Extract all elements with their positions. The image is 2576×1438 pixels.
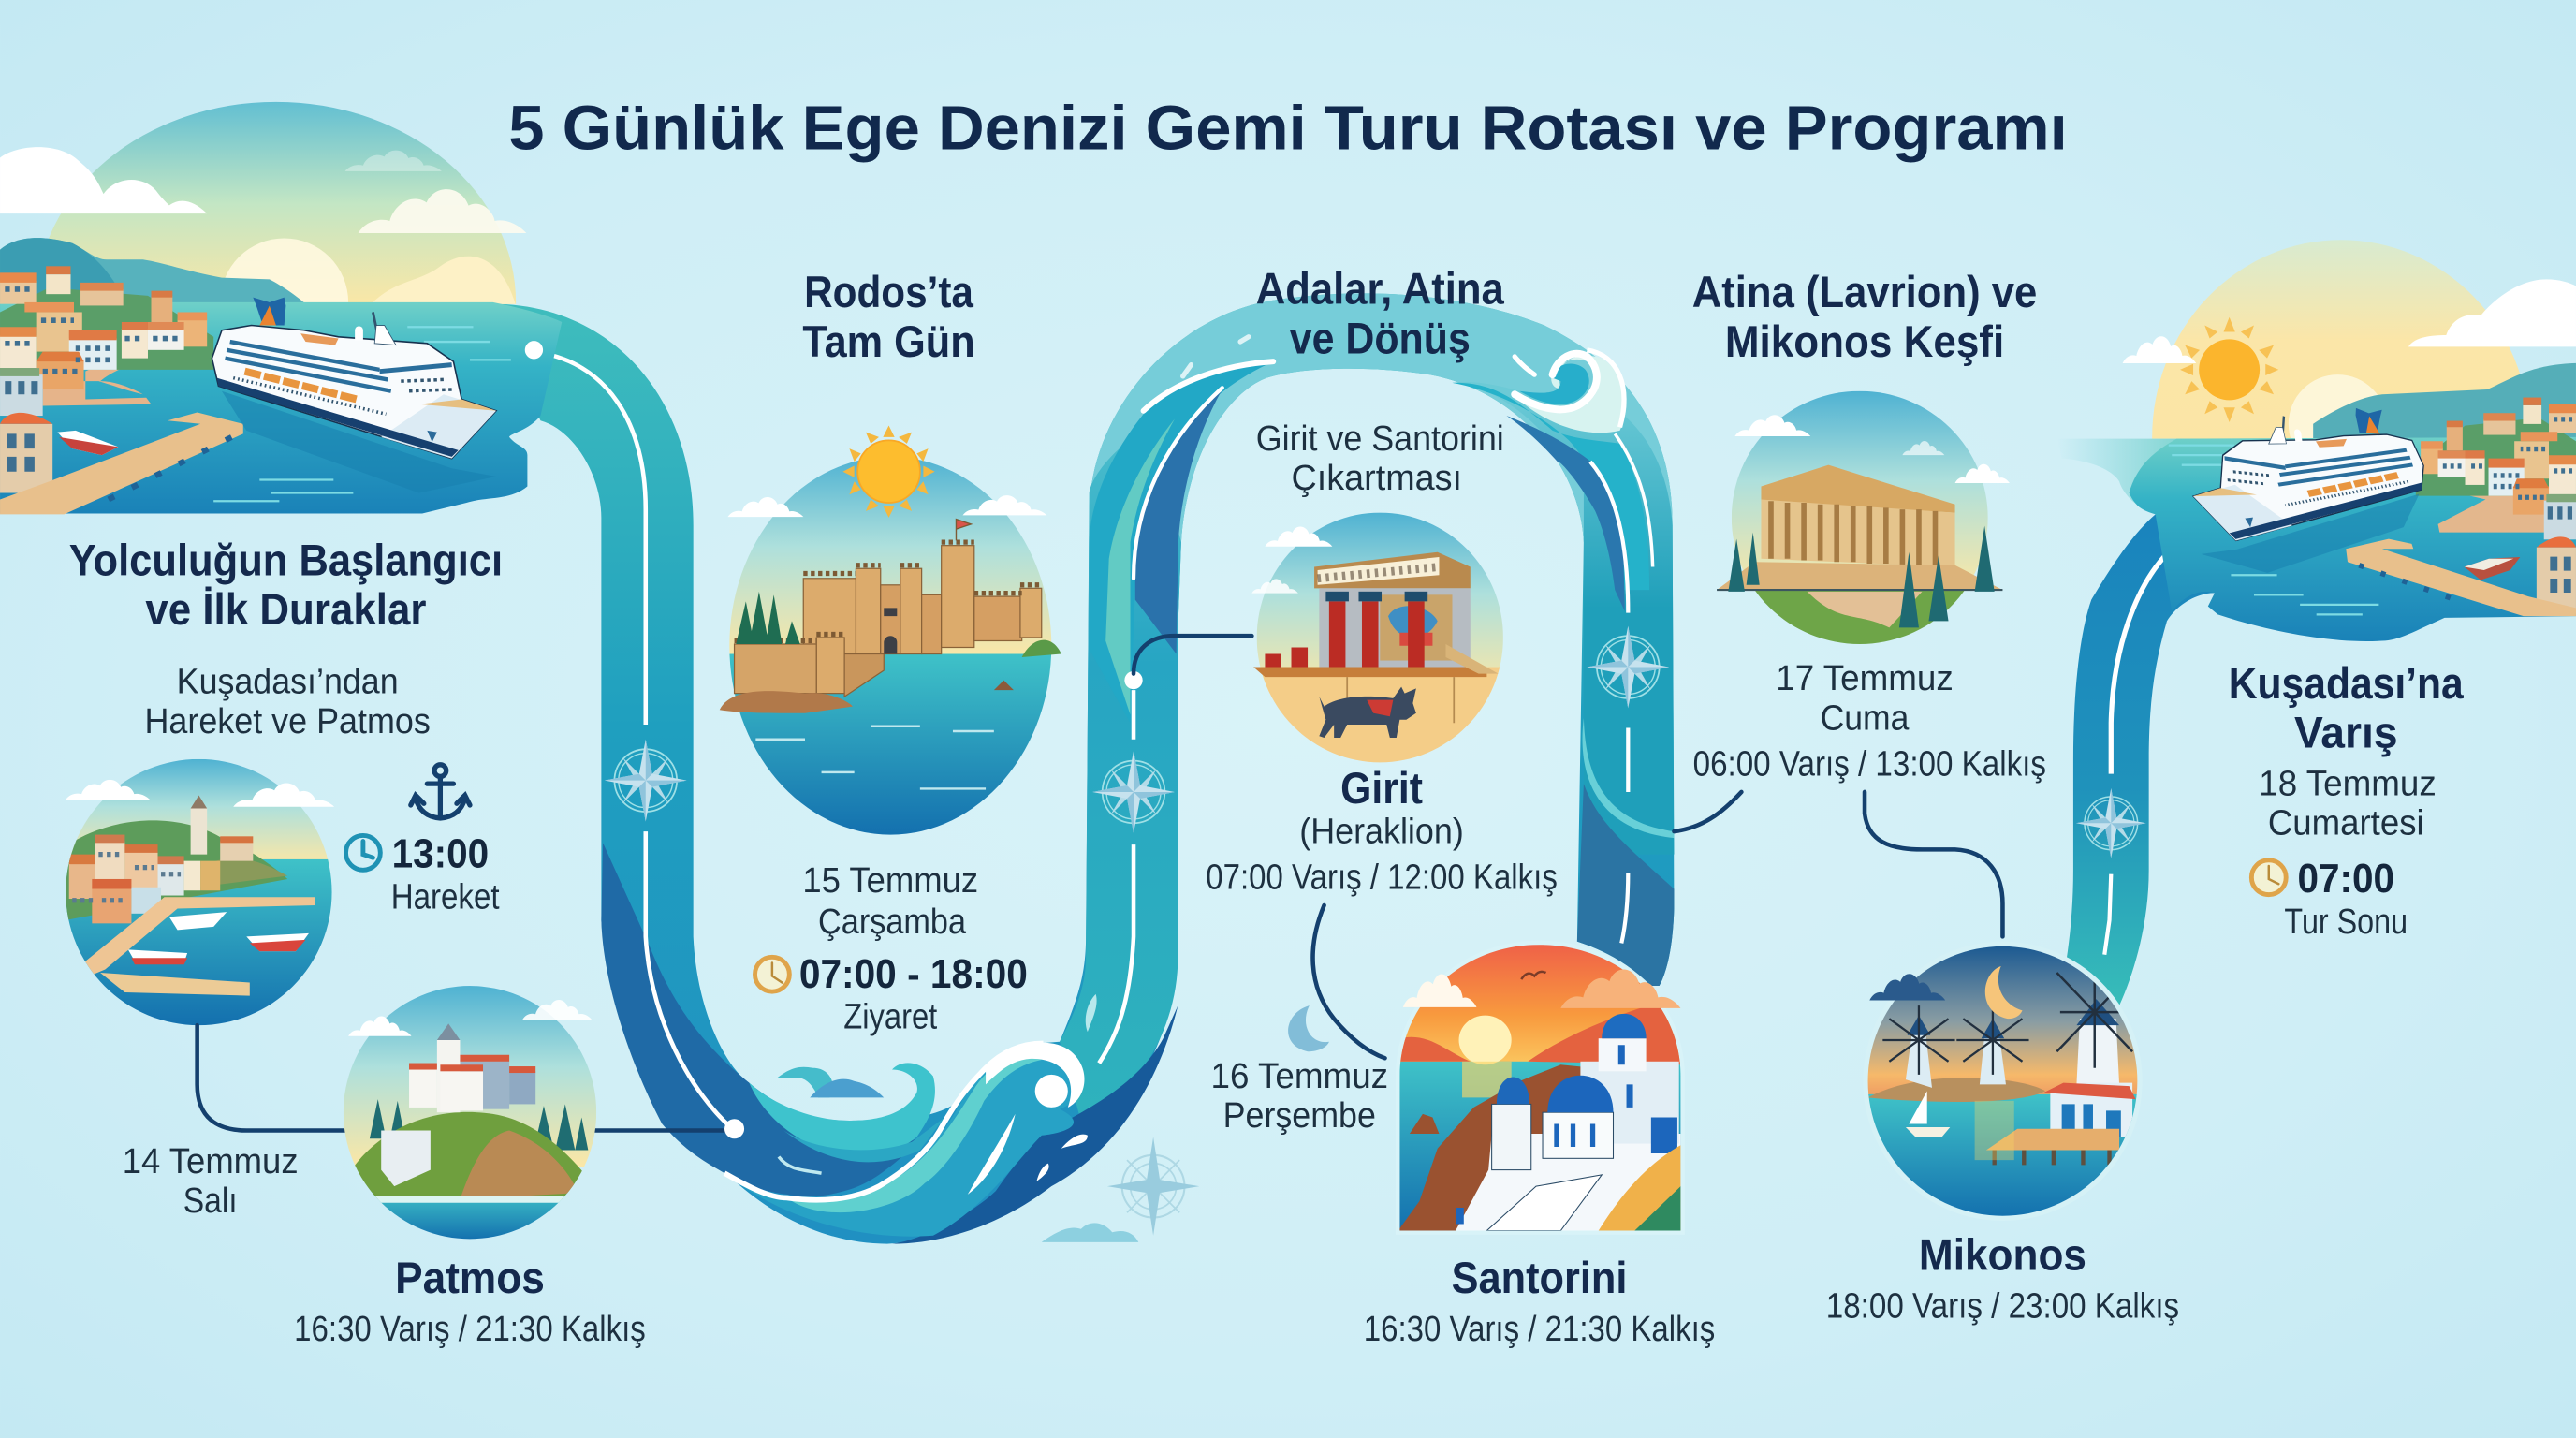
stop: Santorini: 16:30 Varış / 21:30 Kalkış (1364, 1309, 1715, 1348)
circle scene: Girit palace (1251, 513, 1503, 766)
circle scene: Atina temple (1717, 391, 2010, 647)
cruise ship (2179, 397, 2440, 584)
ribbon: right leg of arch (1453, 382, 1674, 855)
sky dome (49, 101, 517, 304)
subheading: Girit and Santorini (1256, 418, 1504, 497)
route ribbon: main winding path (487, 293, 1674, 1244)
stop: Patmos: Patmos (395, 1254, 545, 1303)
circle scene: Kuşadası harbour (66, 759, 334, 1027)
clouds (1734, 415, 2010, 483)
compass: final leg (2076, 788, 2146, 858)
stop: Patmos (294, 1254, 646, 1348)
connector: Patmos to route (594, 1129, 735, 1132)
section heading: Atina (1692, 268, 2037, 367)
icon: anchor (411, 765, 470, 818)
sun glow (2152, 240, 2520, 439)
quay (2426, 468, 2576, 533)
section heading: Rodos: Tam Gün (802, 317, 975, 367)
boat (2465, 557, 2520, 580)
subheading: departure: Hareket ve Patmos (144, 701, 431, 741)
night cloud (1869, 974, 1945, 1000)
section heading: start: ve İlk Duraklar (145, 585, 426, 635)
sun (2180, 317, 2278, 422)
pier (2346, 539, 2576, 616)
subheading: departure (144, 662, 431, 741)
compass: third leg (1587, 626, 1669, 708)
stop: Girit: (Heraklion) (1299, 811, 1464, 850)
bull (1319, 687, 1416, 738)
pier (0, 413, 243, 514)
date: 18 Temmuz (2259, 763, 2437, 843)
icon: clock arrival (2251, 860, 2286, 895)
hero scene: departure port (0, 102, 562, 514)
date: 17 Temmuz: Cuma (1821, 697, 1909, 737)
hero scene: arrival port (2056, 240, 2576, 641)
date: 15 Temmuz (802, 860, 978, 941)
connector: Kuşadası to Patmos (198, 1025, 348, 1130)
compass: background rose (1107, 1137, 1199, 1236)
ribbon: arch white crest lines (1134, 337, 1273, 579)
connector: route to Girit (1134, 636, 1251, 674)
stop: Mikonos (1826, 1231, 2179, 1326)
small cloud lower (1042, 1223, 1138, 1242)
ribbon: droplet (1086, 994, 1097, 1032)
clouds (66, 780, 334, 807)
town (2416, 398, 2576, 613)
time: 07:00 Tur Sonu (2284, 856, 2408, 941)
connector: Girit to Santorini (1313, 905, 1385, 1058)
section heading: Rodos (802, 268, 975, 367)
section heading: Atina: Mikonos Keşfi (1725, 317, 2004, 367)
date: 17 Temmuz: 17 Temmuz (1776, 658, 1954, 697)
circle scene: Rodos castle (720, 426, 1061, 838)
stop: Patmos: 16:30 Varış / 21:30 Kalkış (294, 1309, 646, 1348)
section heading: arrival: Varış (2294, 709, 2398, 758)
circle scene: Mikonos (1863, 942, 2143, 1221)
stop: Girit (1206, 764, 1558, 896)
section heading: Adalar: ve Dönüş (1290, 314, 1471, 363)
subheading: Girit and Santorini: Girit ve Santorini (1256, 418, 1504, 458)
section heading: arrival: Kuşadası’na (2229, 659, 2464, 709)
stop: Santorini: Santorini (1452, 1254, 1627, 1303)
time: Rodos visit (799, 951, 1028, 1036)
section heading: Atina: Atina (Lavrion) ve (1692, 268, 2037, 317)
clouds (2408, 279, 2576, 346)
date: 17 Temmuz: 06:00 Varış / 13:00 Kalkış (1693, 743, 2046, 783)
wave curl on the arch (1515, 350, 1627, 433)
date: 17 Temmuz (1693, 658, 2046, 783)
ribbon: arch left wave band (1090, 361, 1273, 723)
quay (43, 346, 212, 406)
clouds (728, 495, 1046, 517)
ribbon: dark band of the U turn (601, 843, 933, 1196)
section heading: arrival (2229, 659, 2464, 758)
stop: Mikonos: 18:00 Varış / 23:00 Kalkış (1826, 1286, 2179, 1326)
circle scene: Patmos (344, 986, 596, 1240)
subheading: departure: Kuşadası’ndan (177, 662, 399, 701)
time: 13:00 Hareket: 13:00 (392, 831, 489, 877)
clouds (1251, 527, 1332, 594)
date: 14 Temmuz: 14 Temmuz (123, 1141, 299, 1181)
sea fade strip (2056, 439, 2202, 526)
connector: Atina to Mikonos (1865, 792, 2002, 936)
icon: crescent moon (1288, 1005, 1329, 1051)
ribbon: navy outer bottom (892, 1005, 1178, 1244)
stop: Girit: Girit (1340, 764, 1423, 814)
compass: first leg (605, 740, 687, 822)
section heading: start: Yolculuğun Başlangıcı (69, 536, 503, 585)
town (0, 266, 213, 493)
title: 5 Günlük Ege Denizi Gemi Turu Rotası ve Programı (508, 95, 2068, 164)
icon: clock orange (754, 957, 789, 991)
palace (1314, 552, 1471, 588)
date: 16 Temmuz: 16 Temmuz (1211, 1056, 1388, 1095)
section heading: Rodos: Rodos’ta (804, 268, 973, 317)
ribbon: right teal band (1453, 383, 1649, 590)
ribbon: right dark band (1577, 784, 1674, 986)
castle (735, 546, 1042, 697)
date: 14 Temmuz: Salı (183, 1181, 238, 1220)
time: 13:00 Hareket: Hareket (391, 877, 500, 917)
crescent (1985, 966, 2023, 1019)
ribbon: left leg of arch (1060, 427, 1181, 1134)
ribbon: inner teal wave (749, 1063, 935, 1155)
small wave cloud inside U (777, 1067, 884, 1097)
ribbon: white route line, first leg (534, 352, 735, 1130)
time: Rodos visit: Ziyaret (843, 997, 938, 1036)
compass: second leg (1092, 751, 1175, 833)
hills (2313, 363, 2576, 440)
arch scene: Santorini (1397, 942, 1684, 1234)
ribbon: arch dark swoosh (1135, 389, 1222, 654)
time: 07:00 Tur Sonu: 07:00 (2297, 856, 2394, 902)
boat (57, 431, 118, 455)
time: 07:00 Tur Sonu: Tur Sonu (2284, 902, 2408, 941)
cruise ship (212, 298, 496, 493)
ribbon: right dark swoosh (1506, 416, 1625, 611)
section heading: Adalar (1256, 265, 1504, 363)
stop: Mikonos: Mikonos (1919, 1231, 2086, 1281)
clouds (0, 147, 207, 213)
stop: Girit: 07:00 Varış / 12:00 Kalkış (1206, 857, 1558, 896)
section heading: Adalar: Adalar, Atina (1256, 265, 1504, 315)
sun (842, 426, 935, 518)
sea (2130, 437, 2576, 641)
ribbon: white route line, third leg (1590, 462, 1628, 943)
date: 15 Temmuz: 15 Temmuz (802, 860, 978, 900)
hills (0, 238, 304, 312)
route ribbon: final leg with arrow (2056, 514, 2217, 1005)
ribbon: white route line, second leg (1099, 690, 1134, 1064)
route dots (525, 341, 1143, 1138)
section heading: start (69, 536, 503, 635)
clouds (1403, 970, 1680, 1008)
subheading: Girit and Santorini: Çıkartması (1292, 458, 1462, 497)
icon: clock teal (345, 835, 380, 870)
ribbon: pale arch top (1090, 293, 1673, 542)
time: Rodos visit: 07:00 - 18:00 (799, 951, 1028, 997)
ribbon: right pale current line (1583, 718, 1674, 838)
date: 16 Temmuz: Perşembe (1223, 1095, 1376, 1135)
time: 13:00 Hareket (391, 831, 500, 917)
date: 16 Temmuz (1211, 1056, 1388, 1135)
date: 15 Temmuz: Çarşamba (818, 902, 966, 941)
ribbon: big wave body (724, 1046, 1083, 1237)
ribbon: arch left light strip (1105, 419, 1175, 714)
date: 18 Temmuz: Cumartesi (2268, 803, 2424, 843)
temple (1761, 465, 1955, 513)
connector: Atina to route (1674, 792, 1741, 831)
ribbon: wave white foam (724, 1043, 1088, 1200)
stop: Santorini (1364, 1254, 1715, 1348)
date: 18 Temmuz: 18 Temmuz (2259, 763, 2437, 802)
arrow head (2165, 533, 2191, 560)
sea (0, 302, 562, 513)
date: 14 Temmuz (123, 1141, 299, 1220)
